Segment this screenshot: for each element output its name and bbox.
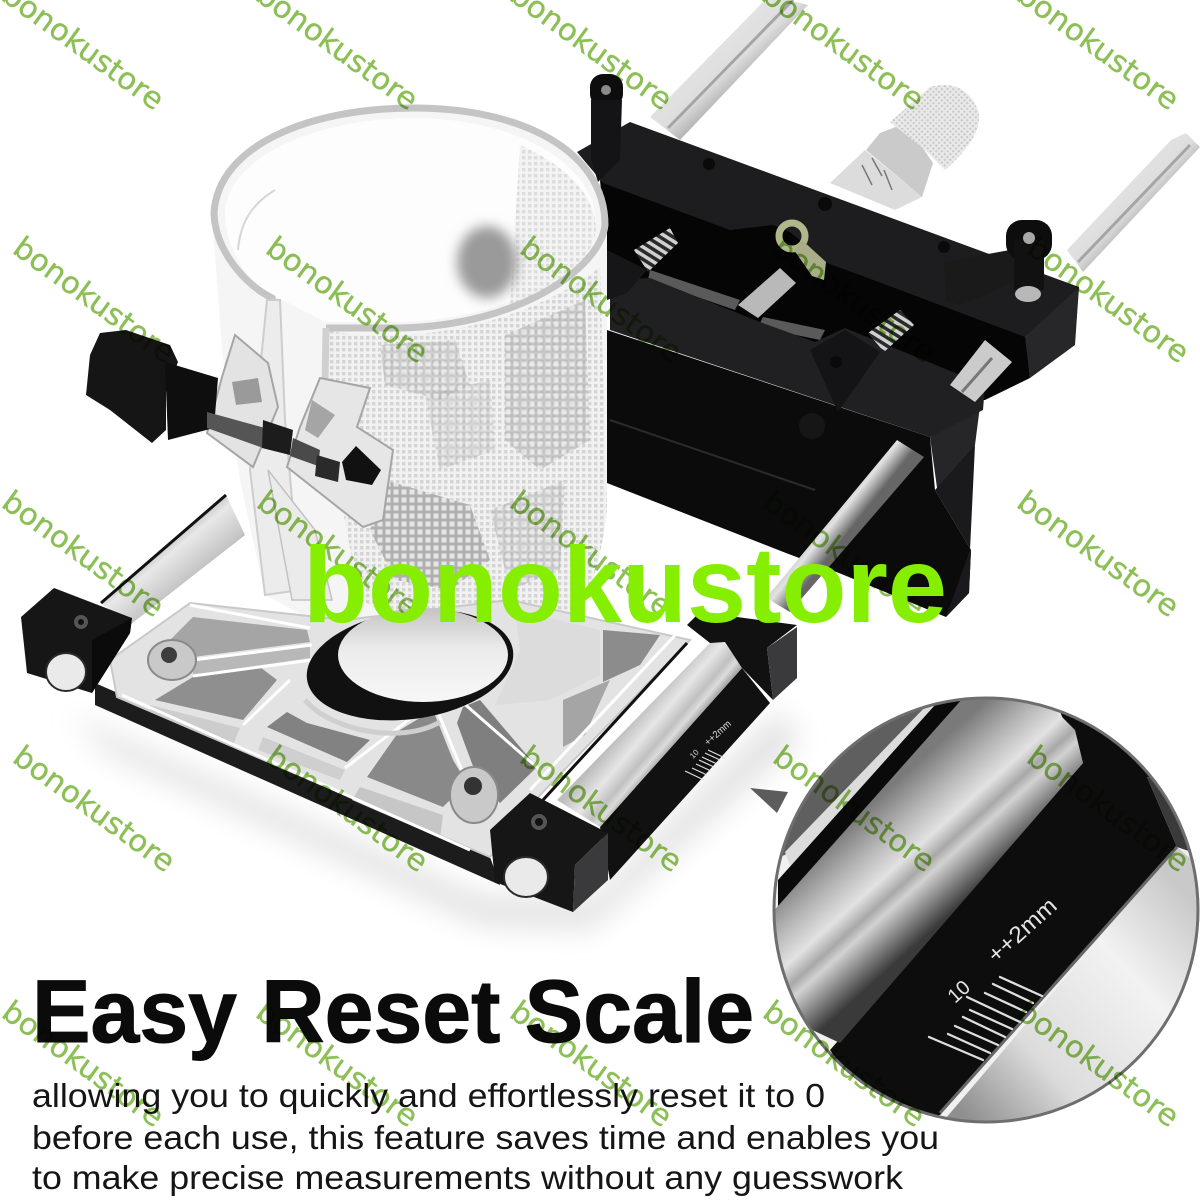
body text: to make precise measurements without any guesswork — [32, 1160, 903, 1197]
guide rod through end block — [950, 340, 1012, 402]
pointer triangle — [750, 788, 788, 813]
watermark grid: bonokustore — [0, 994, 170, 1135]
scale text in lens: ++2mm — [982, 892, 1062, 968]
screws — [703, 158, 715, 170]
watermark grid: bonokustore — [513, 739, 688, 880]
fence lower body — [607, 330, 971, 617]
rear guide rod right — [1067, 133, 1200, 272]
watermark grid: bonokustore — [766, 230, 941, 371]
router bit hole — [299, 597, 521, 733]
micrometer — [830, 85, 979, 210]
fence slot interior — [600, 180, 1030, 400]
fence front bar — [610, 278, 985, 437]
base right rail — [557, 612, 797, 880]
mesh body — [325, 267, 607, 690]
watermark grid: bonokustore — [259, 230, 434, 371]
watermark grid: bonokustore — [1020, 230, 1195, 371]
watermark grid: bonokustore — [6, 230, 181, 371]
body text — [32, 1078, 939, 1197]
heading: Easy Reset Scale — [32, 961, 754, 1061]
watermark grid: bonokustore — [1010, 484, 1185, 625]
wing screw — [779, 223, 805, 249]
rear guide rod left — [650, 0, 808, 140]
watermark grid: bonokustore — [756, 484, 931, 625]
dark spot in cylinder — [457, 226, 517, 298]
base screws — [148, 640, 196, 680]
base panels — [167, 617, 310, 657]
magnified detail circle — [770, 690, 1200, 1130]
watermark grid: bonokustore — [250, 484, 425, 625]
scale text in lens — [948, 901, 1058, 1003]
fence right face — [930, 406, 980, 495]
watermark grid: bonokustore — [1010, 994, 1185, 1135]
large central watermark: bonokustore — [303, 524, 947, 645]
base left rod — [101, 495, 245, 625]
rim — [214, 108, 605, 335]
watermark grid: bonokustore — [6, 739, 181, 880]
watermark grid: bonokustore — [503, 484, 678, 625]
watermark grid: bonokustore — [0, 484, 170, 625]
dark mesh patches — [370, 300, 590, 590]
scale on base — [685, 719, 734, 780]
guide rod stub in slot — [738, 268, 796, 318]
body text: before each use, this feature saves time and enables you — [32, 1120, 939, 1157]
scale on base: ++2mm — [703, 719, 734, 748]
scale ticks — [929, 977, 1042, 1060]
locking knob left — [590, 74, 623, 182]
locking knob right — [944, 220, 1052, 305]
tightening knob and bolt — [86, 330, 381, 485]
front guide rod — [766, 440, 924, 612]
base ribs — [122, 605, 680, 850]
left clamp ear — [207, 335, 278, 467]
base front clamp block — [490, 793, 608, 912]
locking arm — [607, 250, 647, 300]
watermark grid: bonokustore — [513, 230, 688, 371]
watermark grid: bonokustore — [766, 739, 941, 880]
fence top plate — [577, 122, 1079, 337]
watermark grid: bonokustore — [756, 994, 931, 1135]
interior — [225, 118, 596, 322]
clear router cylinder — [207, 106, 607, 695]
watermark grid: bonokustore — [249, 994, 424, 1135]
scale on base: 10 — [688, 747, 701, 760]
base left clamp block — [21, 588, 132, 693]
scale text in lens: 10 — [944, 976, 975, 1008]
right clamp ear — [287, 378, 393, 527]
springs — [634, 228, 678, 272]
base front bar — [95, 683, 500, 885]
transparent router base — [110, 597, 690, 857]
watermark grid: bonokustore — [1020, 739, 1195, 880]
black fence assembly — [577, 122, 1079, 617]
watermark grid: bonokustore — [259, 739, 434, 880]
magnified circle outline — [774, 698, 1198, 1122]
watermark grid: bonokustore — [503, 994, 678, 1135]
grey strips — [648, 270, 740, 310]
body text: allowing you to quickly and effortlessly reset it to 0 — [32, 1078, 825, 1115]
ground shadow — [70, 710, 800, 930]
